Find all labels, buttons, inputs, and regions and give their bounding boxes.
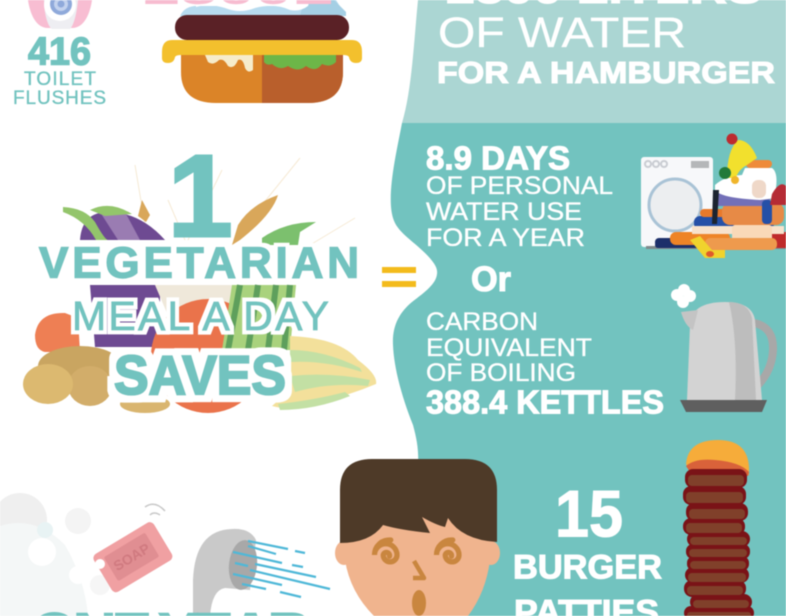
text: 416 toilet flushes: 416 [28, 30, 91, 74]
hair [340, 459, 497, 543]
text: water for a hamburger [437, 0, 775, 90]
text: personal water use: OF PERSONAL [426, 172, 613, 200]
text: personal water use: WATER USE [426, 198, 582, 226]
text: 416 toilet flushes [13, 30, 106, 109]
icon: soap bar: SOAP [110, 540, 153, 574]
text: 1 vegetarian meal a day saves [39, 131, 359, 406]
panel: teal savings background [391, 123, 786, 616]
icon: toilet [28, 0, 92, 29]
text: personal water use [426, 140, 613, 252]
text: 15 burger patties: 15 [555, 476, 623, 550]
text: water for a hamburger: OF WATER [438, 9, 686, 57]
icon: equals sign [382, 267, 416, 287]
text: personal water use: FOR A YEAR [426, 224, 585, 252]
text: carbon equivalent kettles: 388.4 KETTLES [426, 384, 664, 420]
illustration: vegetables [23, 158, 376, 413]
icon: stack of burger patties [683, 440, 754, 616]
text: 416 toilet flushes: TOILET [24, 69, 96, 90]
text: 15 burger patties: BURGER [513, 548, 662, 586]
icon: soap bar [92, 504, 174, 594]
illustration: soap suds [0, 493, 110, 616]
illustration: dizzy face [335, 459, 500, 616]
text: water for a hamburger: FOR A HAMBURGER [437, 55, 775, 90]
text: or: Or [471, 260, 511, 299]
text: 1 vegetarian meal a day saves: MEAL A DAY [72, 293, 329, 339]
text: personal water use: 8.9 DAYS [426, 140, 570, 176]
mouth [412, 590, 426, 616]
text: 416 toilet flushes: FLUSHES [13, 88, 106, 109]
text: 1 vegetarian meal a day saves: SAVES [114, 344, 286, 406]
icon: washing machine and laundry [641, 134, 786, 258]
icon: hamburger [143, 0, 362, 103]
text: 15 burger patties [513, 476, 662, 616]
icon: kettle [671, 284, 773, 412]
text: 1 vegetarian meal a day saves: VEGETARIAN [39, 238, 359, 288]
panel: hamburger water background [402, 0, 786, 123]
nose [413, 561, 424, 578]
text: carbon equivalent kettles [426, 308, 664, 420]
icon: steam puff [671, 284, 696, 308]
icon: shower head [193, 529, 330, 616]
text: carbon equivalent kettles: OF BOILING [426, 359, 576, 387]
eyes [374, 540, 459, 562]
text: carbon equivalent kettles: EQUIVALENT [426, 334, 592, 362]
text: 1 vegetarian meal a day saves: 1 [168, 131, 233, 261]
text: carbon equivalent kettles: CARBON [426, 308, 538, 336]
